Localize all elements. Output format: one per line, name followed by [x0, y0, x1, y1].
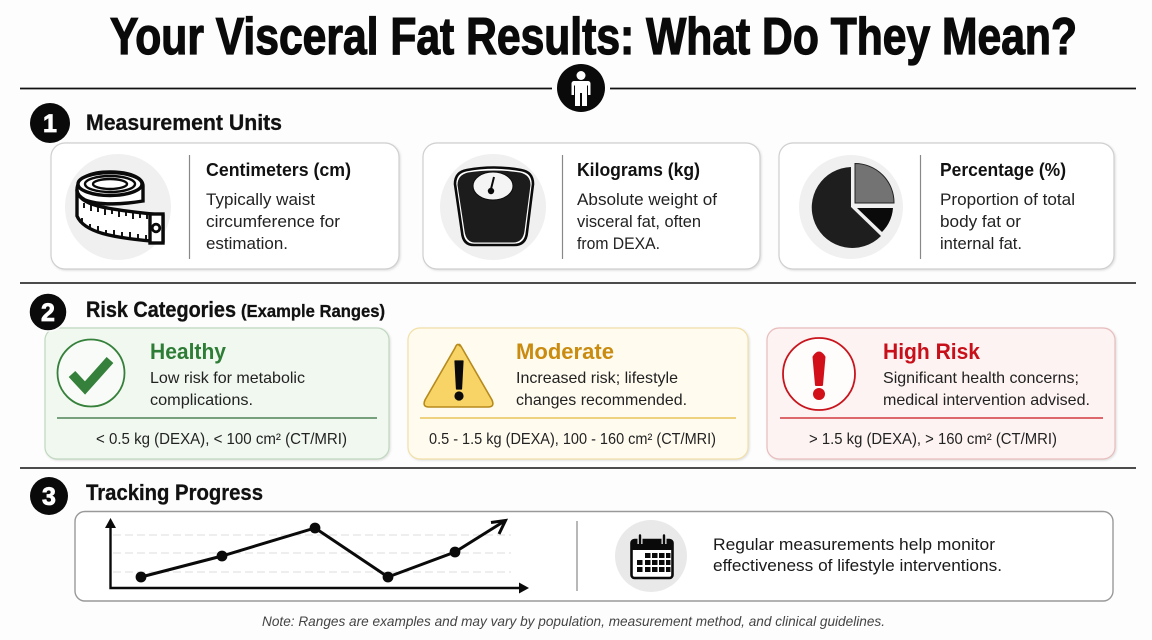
line chart [105, 518, 529, 594]
panel: kilograms [423, 143, 760, 269]
text: percentage: body fat or [940, 213, 1022, 231]
text: kilograms [577, 160, 717, 253]
text: tracking explanation: Regular measurements help monitor [713, 535, 995, 554]
text: high risk: High Risk [883, 339, 981, 364]
section 3: tracking progress [30, 477, 1113, 601]
text: kilograms: Kilograms (kg) [577, 160, 700, 180]
badge 2: 2 [41, 299, 55, 327]
text: healthy [150, 339, 305, 409]
badge 3 [30, 477, 68, 515]
badge 2 [29, 293, 67, 331]
text: high risk range: > 1.5 kg (DEXA), > 160 cm² (CT/MRI) [809, 431, 1057, 448]
panel: high risk [767, 328, 1115, 459]
icon: check mark [58, 340, 124, 406]
text: percentage: internal fat. [940, 235, 1022, 253]
text: percentage: Percentage (%) [940, 160, 1066, 180]
panel: centimeters [51, 143, 399, 269]
panel: tracking [75, 512, 1113, 601]
text: centimeters [206, 160, 351, 253]
text: high risk: Significant health concerns; [883, 370, 1079, 387]
text: high risk: medical intervention advised. [883, 392, 1090, 409]
text: healthy range: < 0.5 kg (DEXA), < 100 cm² (CT/MRI) [96, 431, 347, 448]
panel: percentage [779, 143, 1114, 269]
text: tracking explanation [713, 535, 1002, 575]
heading: tracking progress: Tracking Progress [86, 480, 263, 505]
badge 1 [30, 103, 70, 143]
icon: calendar [615, 520, 687, 592]
text: healthy: complications. [150, 392, 253, 409]
section 1: measurement units [30, 103, 1114, 269]
icon: pie chart [799, 155, 903, 259]
section 2: risk categories [29, 293, 1115, 459]
text: moderate: Increased risk; lifestyle [516, 370, 678, 387]
text: centimeters: Centimeters (cm) [206, 160, 351, 180]
heading: risk categories: (Example Ranges) [241, 301, 385, 321]
icon: tape measure [65, 154, 171, 260]
text: tracking explanation: effectiveness of lifestyle interventions. [713, 556, 1002, 575]
text: healthy: Healthy [150, 339, 227, 364]
text: moderate: changes recommended. [516, 392, 687, 409]
badge 3: 3 [42, 483, 56, 511]
icon: warning triangle [424, 344, 493, 407]
icon: alert circle [783, 338, 855, 410]
text: moderate [516, 339, 687, 409]
heading: risk categories: Risk Categories [86, 297, 236, 322]
text: percentage [940, 160, 1075, 253]
text: kilograms: Absolute weight of [577, 191, 717, 209]
panel: healthy [45, 328, 389, 459]
heading: measurement units: Measurement Units [86, 110, 282, 135]
text: centimeters: circumference for [206, 213, 341, 231]
panel: moderate [408, 328, 748, 459]
badge 1: 1 [43, 110, 57, 138]
icon: bathroom scale [440, 154, 546, 260]
text: percentage: Proportion of total [940, 191, 1075, 209]
text: moderate: Moderate [516, 339, 614, 364]
text: moderate range: 0.5 - 1.5 kg (DEXA), 100 - 160 cm² (CT/MRI) [429, 431, 716, 448]
footnote: Note: Ranges are examples and may vary by population, measurement method, and clinical guidelines. [262, 613, 885, 629]
text: kilograms: from DEXA. [577, 235, 660, 253]
text: centimeters: estimation. [206, 235, 288, 253]
header divider with person icon [20, 64, 1136, 112]
text: high risk [883, 339, 1090, 409]
text: centimeters: Typically waist [206, 191, 315, 209]
text: kilograms: visceral fat, often [577, 213, 701, 231]
text: healthy: Low risk for metabolic [150, 370, 305, 387]
